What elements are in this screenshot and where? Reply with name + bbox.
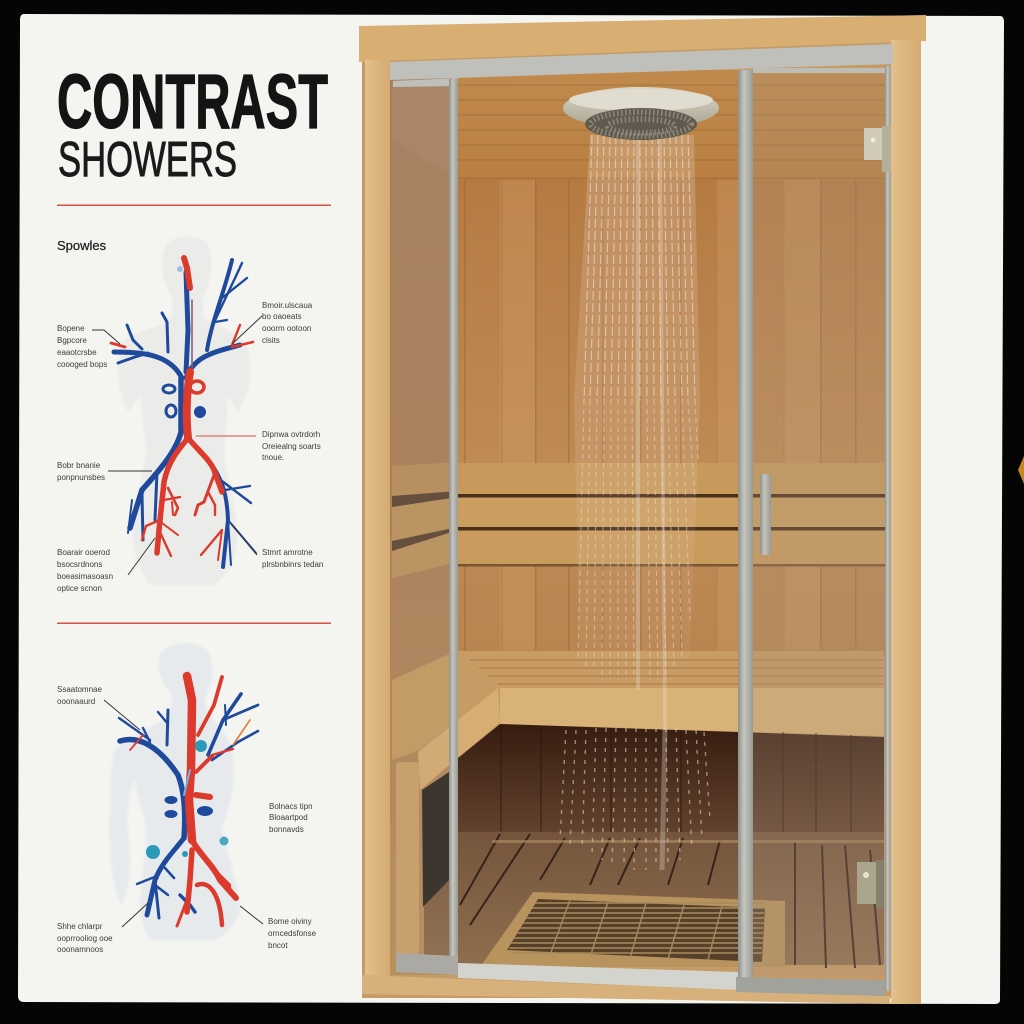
callouts lower figure: Shhe chlarpr (57, 922, 103, 931)
callouts upper figure: bo oaoeats (262, 312, 302, 321)
water streams lower (578, 400, 698, 680)
door handle (760, 474, 771, 555)
callouts lower figure: ooonamnoos (57, 945, 103, 954)
drain mat (480, 892, 785, 967)
callouts upper figure: tnoue. (262, 453, 284, 462)
blue veins upper (114, 260, 256, 567)
left wall corner shading (392, 80, 450, 175)
divider: red middle (57, 622, 331, 624)
callouts lower figure: ooprrooliog ooe (57, 934, 113, 943)
glass tint left door (392, 84, 450, 954)
right door top rail (753, 68, 885, 73)
left floor track (396, 953, 458, 975)
body silhouette lower (110, 643, 240, 940)
callouts upper figure: ponpnunsbes (57, 473, 105, 482)
under-bench planks (500, 726, 852, 840)
callouts upper figure: clsits (262, 336, 280, 345)
callouts upper figure: Oreiealng soarts (262, 442, 321, 451)
interior left wall (390, 70, 458, 975)
callouts upper figure: Stmrt amrotne (262, 548, 313, 557)
organ nodes upper (163, 266, 206, 418)
lower water column (662, 728, 665, 870)
water haze (574, 135, 700, 660)
right-edge orange mark (1018, 456, 1024, 484)
callouts upper figure: coooged bops (57, 360, 107, 369)
callouts lower figure: ooonaaurd (57, 697, 95, 706)
floor (424, 832, 884, 965)
top metal rail (390, 44, 893, 80)
bottom hinge (857, 860, 884, 908)
under-bench dark cavity (458, 724, 884, 835)
section heading: Spowles (57, 238, 107, 253)
anatomy diagram: upper figure (111, 236, 256, 585)
sauna shower illustration (359, 15, 926, 1004)
organ nodes lower (146, 740, 228, 859)
anatomy diagram: lower figure (110, 643, 258, 940)
ceiling lines (458, 85, 888, 178)
callouts lower figure: bncot (268, 941, 288, 950)
callouts upper figure: optice scnon (57, 584, 102, 593)
body silhouette upper (118, 236, 251, 585)
wall planks (464, 180, 856, 650)
callouts upper figure (57, 301, 323, 593)
leader lines upper (92, 316, 262, 575)
back wall (458, 178, 888, 658)
glass tint right door (753, 70, 885, 975)
water lower droplets (560, 728, 710, 870)
callouts upper figure: Dipnwa ovtrdorh (262, 430, 320, 439)
back bench slats (458, 463, 886, 566)
callouts lower figure: bonnavds (269, 825, 304, 834)
callouts lower figure: Bloaartpod (269, 813, 308, 822)
left door inner rail (393, 78, 458, 87)
far-right metal upright (885, 66, 891, 991)
callouts upper figure: plrsbnbinrs tedan (262, 560, 323, 569)
top hinge (864, 126, 891, 172)
top wood beam (359, 15, 926, 62)
left metal upright (449, 79, 458, 964)
callouts lower figure: Bolnacs tipn (269, 802, 313, 811)
water streams upper (584, 135, 695, 400)
callouts upper figure: boeasimasoasn (57, 572, 113, 581)
title: CONTRAST (57, 59, 328, 145)
callouts lower figure: orncedsfonse (268, 929, 317, 938)
lighter wall plank tints (500, 180, 820, 650)
divider: red top (57, 204, 331, 206)
right door metal upright (738, 70, 753, 978)
callouts upper figure: bsocsrdnons (57, 560, 102, 569)
shower head (563, 87, 719, 140)
callouts upper figure: Bopene (57, 324, 85, 333)
lower bench seat (392, 650, 884, 954)
floor slats (460, 834, 880, 968)
leader lines lower (104, 700, 263, 927)
dark glass panel (422, 770, 452, 907)
center floor track (458, 963, 738, 990)
callouts lower figure: Ssaatomnae (57, 685, 102, 694)
red arteries upper (111, 258, 253, 560)
callouts upper figure: ooorm ootoon (262, 324, 311, 333)
right floor track (736, 977, 885, 996)
title (57, 59, 328, 187)
callouts lower figure (57, 685, 317, 954)
red arteries lower (130, 676, 250, 926)
callouts upper figure: Boarair ooerod (57, 548, 110, 557)
bottom wood sill (362, 975, 890, 1004)
central water column (638, 135, 665, 730)
floor slat highlight (492, 840, 884, 843)
interior backing (362, 38, 921, 998)
callouts upper figure: Bgpcore (57, 336, 87, 345)
title: SHOWERS (58, 133, 237, 187)
callouts upper figure: Bmoir.ulscaua (262, 301, 313, 310)
blue veins lower (119, 694, 258, 918)
right wood post (891, 40, 921, 1004)
left wood post (365, 60, 390, 980)
callouts upper figure: eaaotcrsbe (57, 348, 97, 357)
callouts upper figure: Bobr bnanie (57, 461, 101, 470)
ceiling (458, 70, 888, 180)
left wall bench slats (392, 462, 458, 578)
callouts lower figure: Bome oiviny (268, 917, 312, 926)
